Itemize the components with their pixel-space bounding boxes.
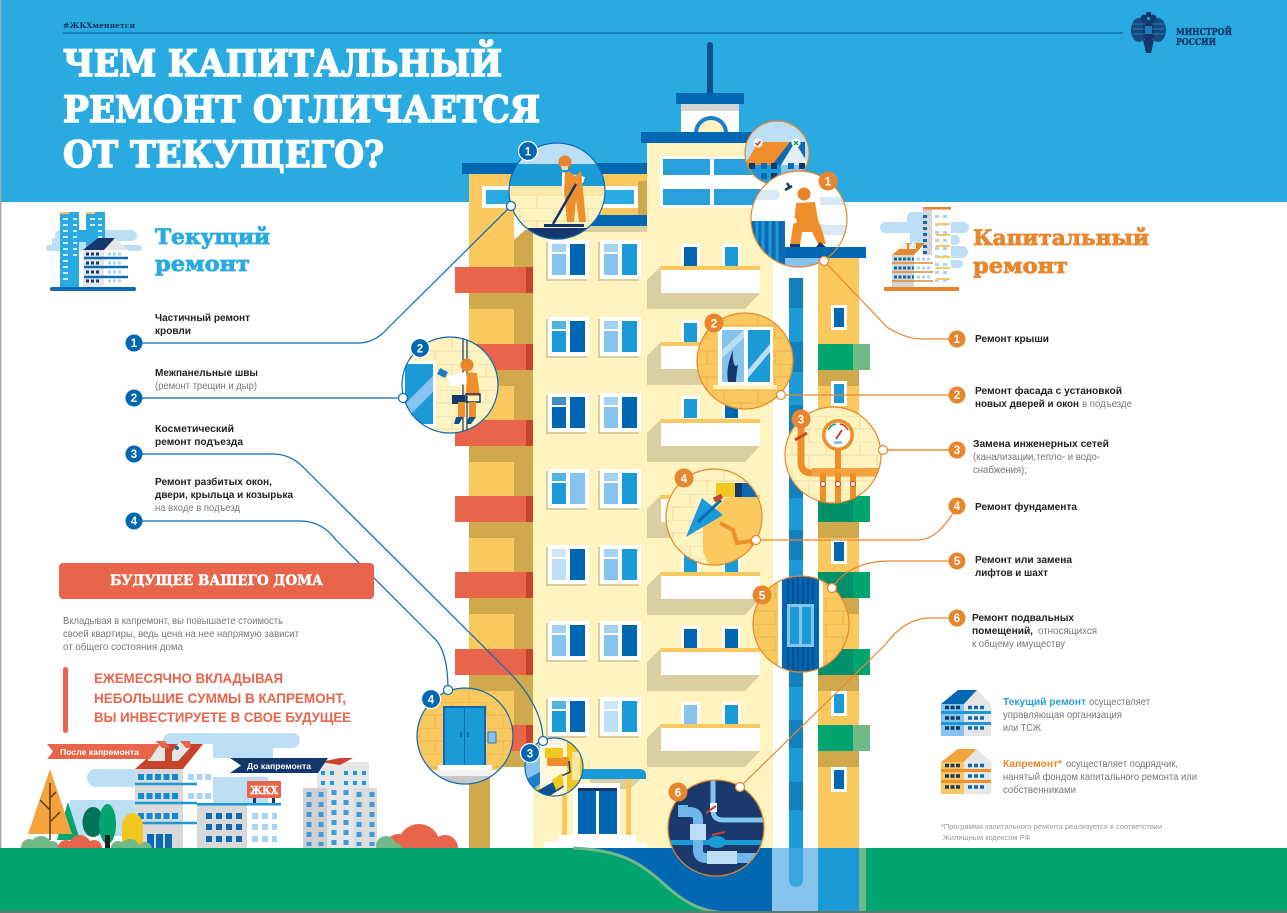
paragraph: investing: Вкладывая в капремонт, вы повышаете стоимость [63,615,283,627]
circle number badges: 5 [759,590,766,602]
circle: roof repair worker [751,171,847,268]
icon: major repair building [880,207,969,291]
item 6: относящихся [1038,625,1097,637]
callout: monthly investment [63,667,351,733]
building: antenna and roof turret [676,42,744,133]
building: window grid [546,240,641,738]
circle number badges: 3 [798,414,804,426]
circle number badges: 4 [428,694,435,706]
banner: future of your home [59,563,374,599]
footnote: *Программа капитального ремонта реализуется в соответствии [941,822,1162,831]
item 5: 5 [954,556,961,568]
city: ribbon before repair [230,758,328,773]
circle number badges: 1 [825,176,832,188]
building: central cream tower [533,132,773,848]
title: ЧЕМ КАПИТАЛЬНЫЙ [63,40,502,85]
header band [0,0,1287,202]
icon: orange house [941,749,991,794]
item 2: Межпанельные швы [155,367,258,379]
city: ribbon after repair [47,744,160,759]
city: ribbon after repair: После капремонта [60,747,139,757]
item 2: 2 [954,390,960,402]
heading: major repair: Капитальный [973,225,1149,250]
item 4: 4 [131,516,138,528]
callout: monthly investment: ВЫ ИНВЕСТИРУЕТЕ В СВОЕ БУДУЩЕЕ [94,710,351,725]
circle: basement pipes [668,780,764,876]
item 6: помещений, [972,625,1033,637]
item 1 [948,330,1049,348]
item 4: Ремонт фундамента [975,501,1077,513]
item 3 [126,423,243,462]
building: red balconies [455,267,533,751]
footnote: Жилищным кодексом РФ [943,833,1030,842]
heading: current repair: ремонт [155,251,250,276]
right connector lines [740,261,957,787]
circle number badges: 3 [527,748,533,760]
icon: blue house [941,690,991,736]
item 4: на входе в подъезд [155,502,240,514]
title [63,40,540,176]
item 3: 3 [131,449,137,461]
city: clouds [70,733,300,836]
item 4 [126,476,293,530]
city: ZhKH sign: ЖКХ [250,784,278,797]
item 5 [948,552,1072,579]
building: entrance with canopy [544,769,647,848]
legend text: current repair [1003,696,1150,734]
logo: Minstroy eagle and name [1131,12,1232,53]
circle: engineering networks [785,407,881,503]
building: left orange wing [462,163,647,848]
item 1 [126,312,250,352]
item 4: 4 [954,501,961,513]
city: ZhKH sign [247,781,281,803]
legend text: current repair: осуществляет [1089,696,1150,708]
banner: future of your home: БУДУЩЕЕ ВАШЕГО ДОМА [110,573,324,589]
item 3: (канализации,тепло- и водо- [973,451,1100,463]
legend text: major repair: осуществляет подрядчик, [1066,758,1178,770]
circle: roof icon with check marks [746,122,808,183]
item 3: ремонт подъезда [155,436,243,448]
item 3: снабжения); [973,464,1027,476]
legend text: current repair: управляющая организация [1003,709,1122,721]
item 1: Ремонт крыши [975,333,1049,345]
item 6: к общему имуществу [972,638,1066,650]
circle: cosmetic repair of entrance [525,738,583,800]
right list: major repair items [948,330,1132,650]
paragraph: investing: от общего состояния дома [63,641,183,653]
city: tower before repair [303,758,377,848]
item 2 [126,367,258,406]
circle number badges: 1 [525,146,532,158]
circle number badges: 4 [681,474,688,486]
item 3: Замена инженерных сетей [973,438,1109,450]
legend text: major repair [1003,758,1197,796]
item 4: двери, крыльца и козырька [155,489,293,501]
item 2: (ремонт трещин и дыр) [155,380,257,392]
circle number badges: 2 [417,344,423,356]
item 2: 2 [131,393,137,405]
legend text: current repair: или ТСЖ [1003,722,1041,734]
item 2: в подъезде [1082,398,1132,410]
logo: Minstroy eagle and name: МИНСТРОЙ [1176,25,1232,38]
item 4 [948,498,1077,514]
city: ribbon before repair: До капремонта [247,761,311,771]
circle number badges: 6 [675,788,681,800]
legend text: major repair: нанятый фондом капитального ремонта или [1003,771,1197,783]
circle: foundation repair [666,469,762,566]
item 1: кровли [155,325,191,337]
circle number badges: 2 [711,318,717,330]
heading: current repair: Текущий [155,224,270,249]
circle number badges [410,142,838,802]
paragraph: investing: своей квартиры, ведь цена на нее напрямую зависит [63,628,299,640]
city illustration: before and after [21,733,458,848]
item 3 [948,438,1109,476]
icon: current repair building [46,212,142,291]
hashtag: #ЖКХменяется [63,21,135,30]
city: middle building [197,803,281,848]
heading: major repair: ремонт [973,253,1068,278]
item 1: Частичный ремонт [155,312,250,324]
circle: partial roof repair [510,144,604,238]
item 5: лифтов и шахт [975,567,1048,579]
item 4: Ремонт разбитых окон, [155,476,272,488]
item 5: Ремонт или замена [975,554,1072,566]
legend text: major repair: Капремонт* [1003,758,1063,770]
legend: major repair [941,749,1197,796]
item 2: новых дверей и окон [975,398,1079,410]
item 3: Косметический [155,423,234,435]
item 2 [948,385,1132,410]
item 6: Ремонт подвальных [972,612,1074,624]
city: after-repair building [135,741,213,848]
circle: entrance door repair [417,688,513,786]
title: РЕМОНТ ОТЛИЧАЕТСЯ [63,89,540,131]
city: trees and bushes [21,769,458,848]
callout: monthly investment: НЕБОЛЬШИЕ СУММЫ В КАПРЕМОНТ, [94,691,346,706]
building: elevator shaft [789,278,803,848]
legend text: major repair: собственниками [1003,784,1076,796]
item 1: 1 [954,334,961,346]
building: right orange wing [785,247,870,848]
ground [0,848,1287,913]
item 6: 6 [954,613,960,625]
logo: Minstroy eagle and name: РОССИИ [1176,38,1216,48]
building: side balconies with small windows [647,244,760,767]
item 3: 3 [954,445,960,457]
footnote [941,822,1162,842]
item 2: Ремонт фасада с установкой [975,385,1122,397]
legend: current repair [941,690,1150,736]
circle: facade and window repair [697,313,793,409]
building [455,42,870,848]
anchor dots [398,202,888,792]
circle: elevator and shaft [753,576,849,672]
title: ОТ ТЕКУЩЕГО? [63,134,384,176]
left list: current repair items [126,312,293,530]
item 6 [948,610,1097,650]
heading: current repair [155,224,270,276]
left connector lines [134,206,543,741]
legend text: current repair: Текущий ремонт [1003,696,1086,708]
callout: monthly investment: ЕЖЕМЕСЯЧНО ВКЛАДЫВАЯ [94,671,283,686]
item 1: 1 [131,338,138,350]
paragraph: investing [63,615,299,653]
heading: major repair [973,225,1149,278]
circle: panel seams [402,337,498,433]
